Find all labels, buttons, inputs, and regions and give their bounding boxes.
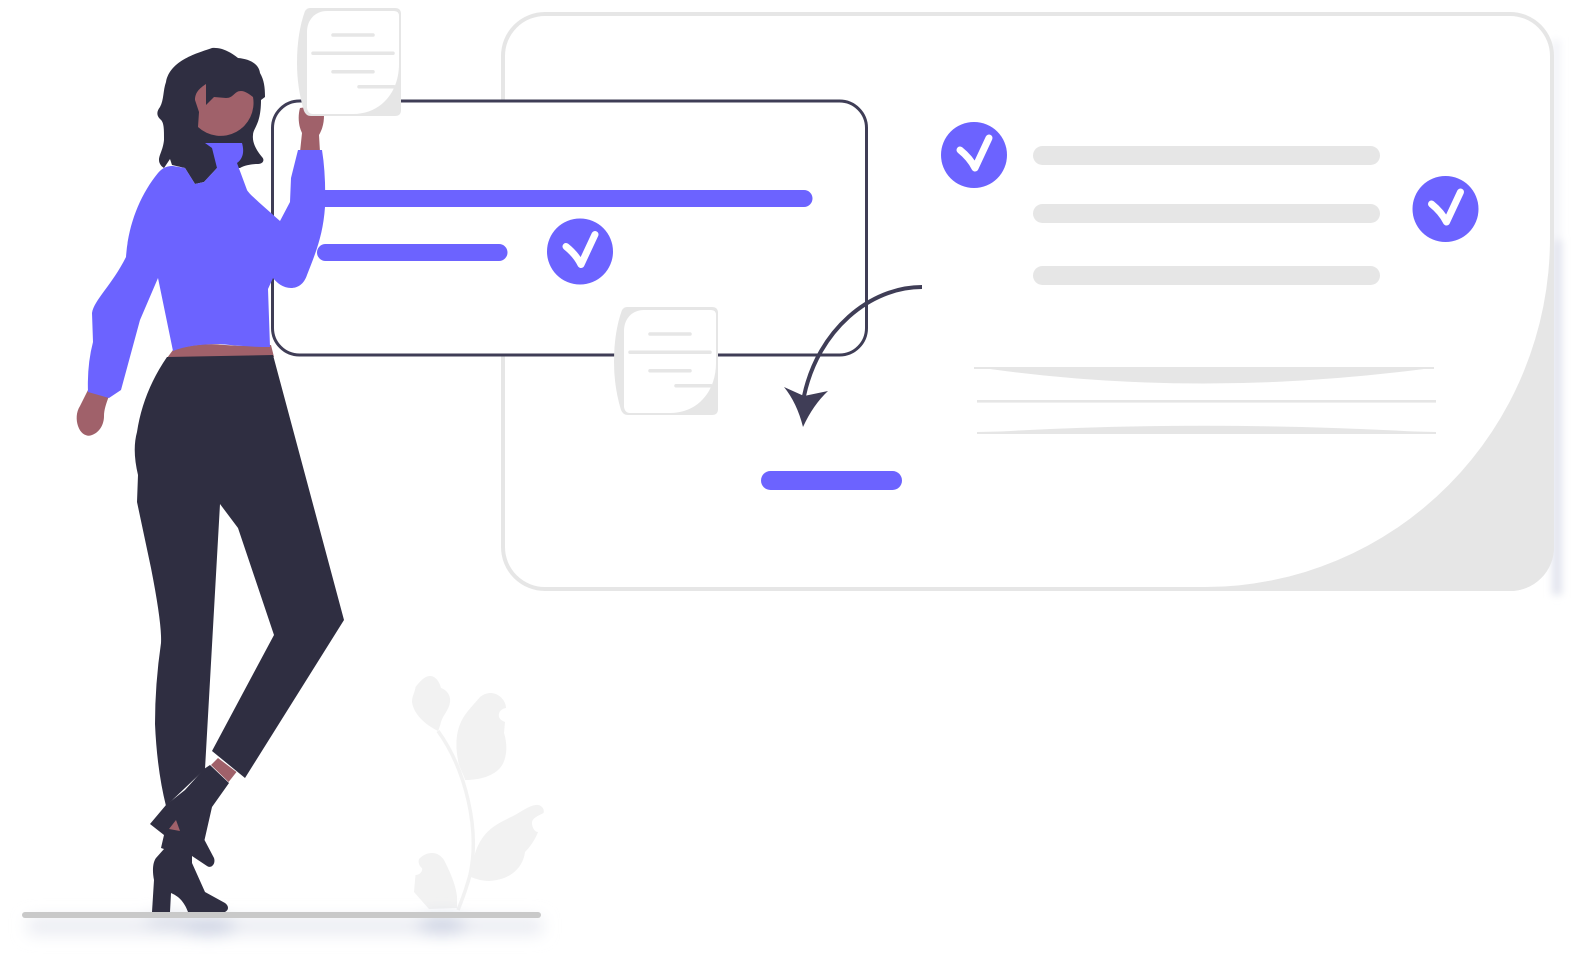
list bar 2	[1033, 204, 1380, 223]
floor line	[22, 912, 541, 918]
ankle gap	[169, 820, 180, 831]
check badge: small card	[547, 218, 613, 284]
shoes	[150, 765, 229, 912]
check badge: right	[1412, 176, 1478, 242]
ankle	[211, 758, 236, 782]
panel: big card	[503, 14, 1554, 591]
leaf 2	[456, 693, 506, 780]
panel: small card	[272, 101, 866, 355]
raised hand	[299, 105, 324, 152]
long purple bar	[300, 190, 812, 207]
leaf 1	[412, 676, 450, 731]
curved line 1	[974, 367, 1434, 384]
lower hand	[77, 390, 109, 436]
plant	[412, 676, 544, 910]
document: held	[297, 8, 401, 116]
button bar	[761, 471, 902, 490]
arrow	[784, 287, 922, 427]
list bar 3	[1033, 266, 1380, 285]
short purple bar	[317, 244, 508, 261]
list bar 1	[1033, 146, 1380, 165]
curved line 3	[977, 426, 1436, 434]
person	[77, 8, 401, 912]
trousers	[135, 355, 344, 806]
card corner fold	[1205, 238, 1554, 591]
document: lower	[614, 307, 718, 415]
face	[195, 84, 254, 136]
check badge: top left	[941, 122, 1007, 188]
shadow: big card	[1552, 40, 1562, 595]
sweater	[88, 143, 325, 398]
straight line 2	[977, 400, 1436, 403]
leaf 3	[471, 805, 544, 881]
leaf 4	[414, 853, 457, 909]
stem	[438, 731, 473, 910]
floor shadow	[28, 914, 542, 935]
hair	[157, 48, 265, 184]
waist	[167, 344, 274, 358]
